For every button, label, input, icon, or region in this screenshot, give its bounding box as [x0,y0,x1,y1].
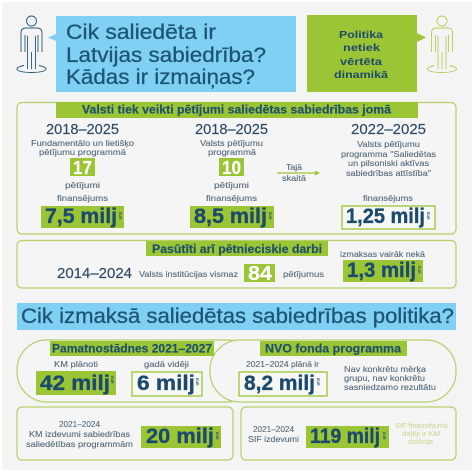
content: guidelines: gadā vidēji [144,360,189,369]
content: guidelines [36,341,214,396]
panel: SIF spending: 119 milj [310,425,380,448]
speech bubble: policy not evaluated: dinamikā [334,69,388,81]
amount: 8,2 million: 8,2 milj [244,372,315,395]
panel: state research [17,102,456,234]
panel: ministry spending: 2021–2024 [59,420,100,429]
content: guidelines: 42 milj [40,372,110,395]
column: state programme: finansējums [206,194,257,203]
arrow: included in total: skaitā [282,174,306,183]
panel: SIF spending: SIF izdevumi [248,435,299,444]
panel: SIF spending [241,407,456,460]
column: state programme: Valsts pētījumu [200,139,263,148]
arrow: included in total: Tajā [286,163,302,172]
note: SIF funding: SIF finansējumā [395,421,449,430]
column: cohesive society programme: programma "Saliedētas [341,150,436,159]
column: fundamental programme: pētījumi [65,181,100,190]
panel: ministry spending: KM izdevumi sabiedrības [29,430,130,439]
speech bubble: policy not evaluated: netiek [343,42,380,54]
column: cohesive society programme: finansējums [363,194,413,203]
column: fundamental programme: EUR [118,212,122,220]
note: no target group: sasniedzamo rezultātu [344,382,436,392]
column: cohesive society programme: EUR [426,212,430,220]
column: cohesive society programme: 2022–2025 [351,121,426,138]
note: no target group: grupu, nav konkrētu [344,373,425,383]
column: state programme: 10 [222,158,241,178]
panel: ministry spending: 20 milj [146,425,214,448]
speech bubble: main question: Cik saliedēta ir [66,21,216,44]
column: fundamental programme [31,121,134,228]
panel: ministry spending: EUR [215,432,219,440]
cost: 1,3 million: izmaksas vairāk nekā [340,250,425,259]
content: guidelines: EUR [195,378,199,386]
heading: commissioned research [146,241,328,256]
panel: ministry spending [17,407,233,460]
column: state programme [190,121,274,228]
column: fundamental programme: 17 [73,158,92,178]
cost: 1,3 million: 1,3 milj [347,259,416,282]
text: state institutions: Valsts institūcijas vismaz [139,270,238,279]
panel: commissioned research [17,240,456,288]
icon: person left [17,16,46,72]
column: fundamental programme: Fundamentālo un lietišķo [31,139,134,148]
heading: state research [56,102,418,118]
speech bubble: main question [48,16,296,92]
content: guidelines: EUR [110,376,114,384]
column: cohesive society programme: un pilsoniski aktīvas [348,159,429,168]
icon: person right [428,16,456,72]
arrow: included in total [277,163,320,183]
panel: SIF spending: EUR [382,432,386,440]
heading: NGO fund: NVO fonda programma [265,342,401,356]
amount: 8,2 million: EUR [316,378,320,386]
speech bubble: policy not evaluated: vērtēta [340,56,382,68]
column: cohesive society programme: Valsts pētījumu [357,140,420,149]
panel: NGO fund programme [210,340,456,402]
heading: cost of cohesion policy: Cik izmaksā saliedētas sabiedrības politika? [21,305,454,328]
column: cohesive society programme: sabiedrības attīstība" [346,169,431,178]
content: guidelines: Pamatnostādnes 2021–2027 [52,342,212,356]
number: 84 studies [244,263,324,285]
column: state programme: programmā [208,148,256,157]
note: SIF funding: dotācija [408,437,434,446]
panel: guidelines 2021-2027 [17,340,257,402]
period: 2014–2024 [57,265,132,282]
content: guidelines: KM plānoti [54,360,98,369]
number: 84 studies: 84 [248,263,273,285]
heading: state research: Valsti tiek veikti pētījumi saliedētas sabiedrības jomā [82,104,392,116]
speech bubble: policy not evaluated [307,15,426,92]
column: state programme: EUR [268,212,272,220]
column: cohesive society programme [341,121,436,229]
note: SIF funding: daļēji ir KM [402,429,440,438]
panel: SIF spending: 2021–2024 [253,425,294,434]
speech bubble: main question: Kādas ir izmaiņas? [66,66,255,89]
column: fundamental programme: 7,5 milj [45,205,117,228]
speech bubble: main question: Latvijas sabiedrība? [66,44,266,67]
column: state programme: pētījumi [214,181,249,190]
column: state programme: 2018–2025 [195,121,268,138]
panel: ministry spending: saliedētības programmām [26,440,133,449]
column: state programme: 8,5 milj [194,205,267,228]
column: fundamental programme: 2018–2025 [46,121,119,138]
panel: NGO fund programme: 2021–2024 plānā ir [246,360,319,369]
column: cohesive society programme: 1,25 milj [346,205,425,228]
column: fundamental programme: finansējums [57,194,108,203]
speech bubble: policy not evaluated: Politika [339,29,383,41]
note: SIF funding [395,421,449,446]
heading: commissioned research: Pasūtīti arī pētnieciskie darbi [152,244,322,256]
content: guidelines: 6 milj [137,372,195,395]
cost: 1,3 million [340,250,425,282]
note: no target group [344,364,436,392]
cost: 1,3 million: EUR [417,266,421,274]
number: 84 studies: pētījumus [283,270,324,279]
column: fundamental programme: pētījumu programmā [39,148,127,157]
note: no target group: Nav konkrētu mērķa [344,364,426,374]
